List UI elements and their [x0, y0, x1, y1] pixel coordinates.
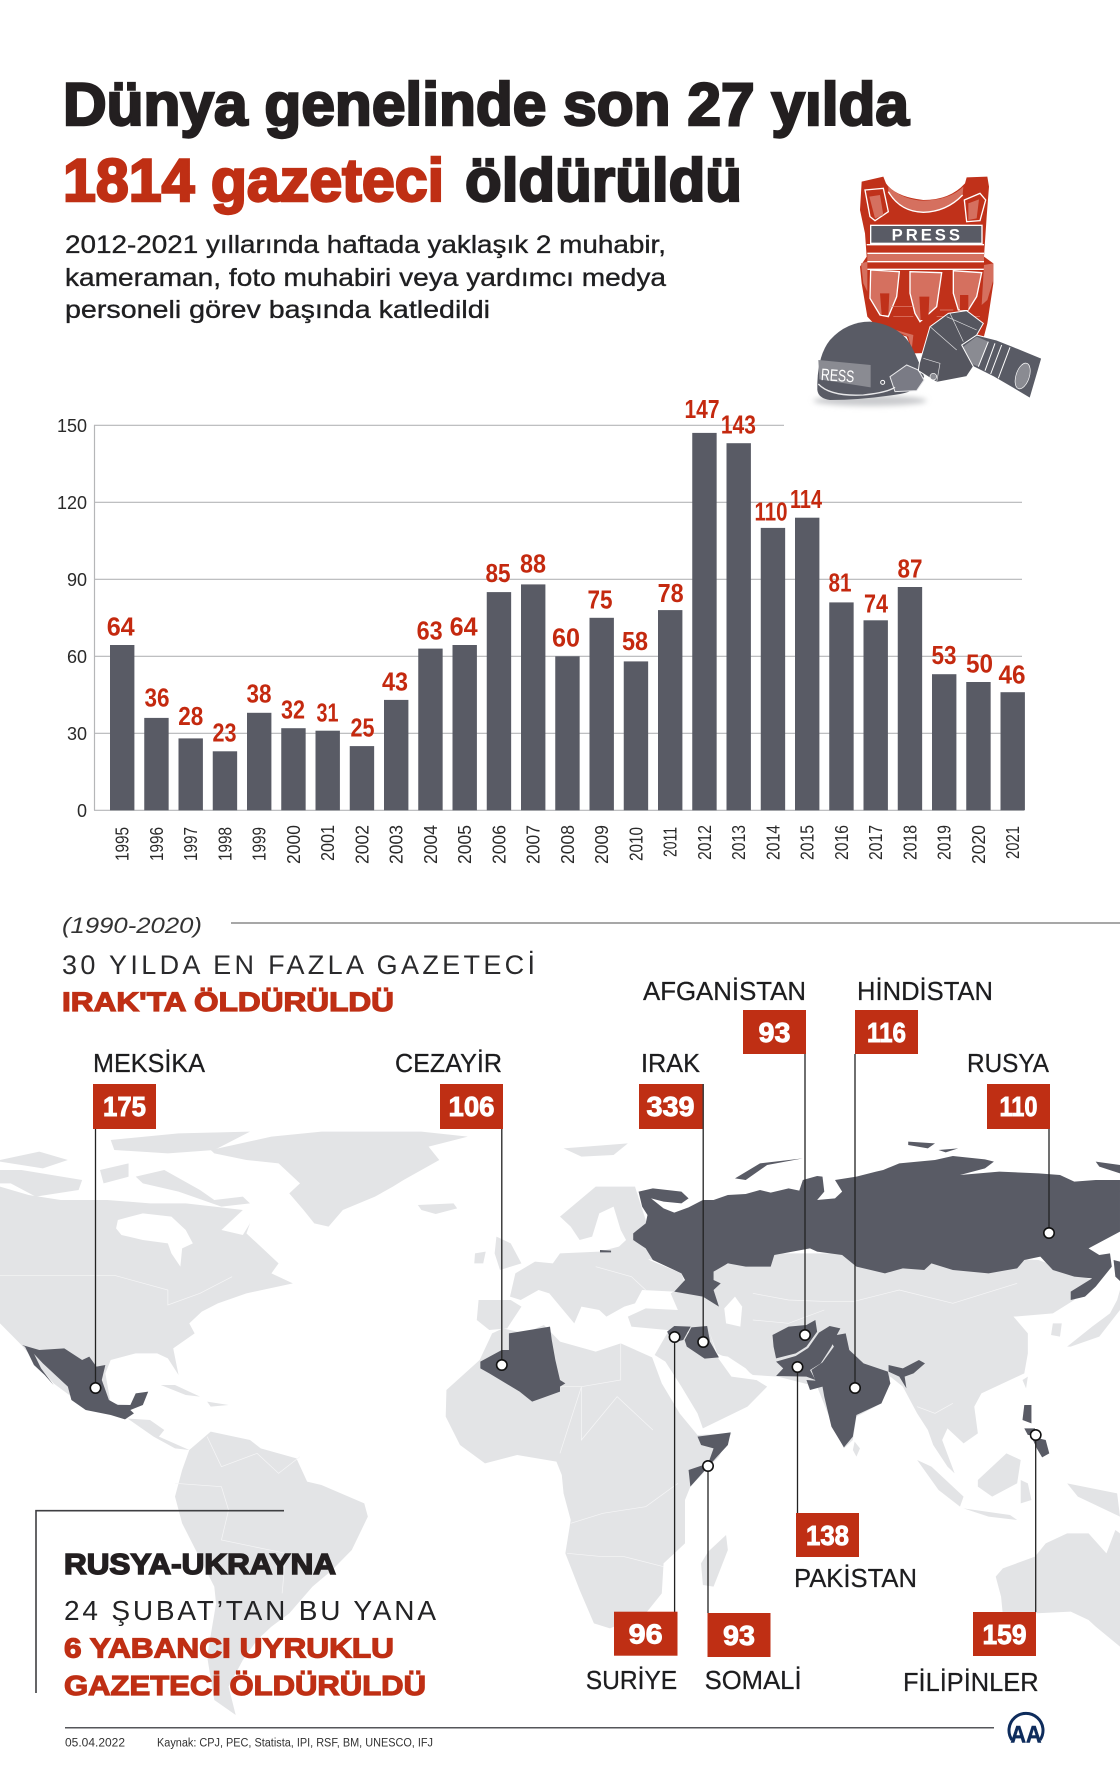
x axis years: 2012 — [695, 825, 715, 860]
bar value labels: 38 — [246, 679, 272, 709]
bar value labels: 25 — [350, 713, 374, 743]
callout: Rusya 110: RUSYA — [967, 1048, 1050, 1078]
world map — [0, 1132, 1120, 1715]
callout: Irak 339: 339 — [646, 1091, 694, 1122]
bar value labels: 78 — [658, 578, 684, 608]
vest — [860, 177, 993, 353]
bar value labels: 75 — [588, 585, 612, 615]
x axis years: 2005 — [455, 825, 475, 864]
bar value labels: 147 — [684, 394, 720, 424]
callout: Afganistan 93: AFGANİSTAN — [643, 976, 806, 1006]
x axis years: 2016 — [832, 825, 852, 860]
icon: press vest, helmet and camera — [813, 177, 1042, 406]
helmet: RESS — [820, 365, 855, 386]
bar value labels: 32 — [281, 694, 305, 724]
bar value labels: 60 — [552, 623, 580, 653]
y axis labels: 90 — [67, 570, 87, 590]
x axis years: 2000 — [284, 825, 304, 864]
callout: Cezayir 106: 106 — [448, 1091, 494, 1122]
callout: Meksika 175: 175 — [103, 1091, 146, 1122]
grid and axis — [94, 425, 1024, 810]
y axis labels — [57, 416, 87, 821]
x axis years: 2010 — [626, 827, 646, 861]
panel: Russia-Ukraine note: 6 YABANCI UYRUKLU — [64, 1633, 394, 1664]
x axis years: 2006 — [490, 825, 510, 864]
x axis years: 1999 — [250, 827, 270, 861]
subtitle text: 2012-2021 yıllarında haftada yaklaşık 2 muhabir, — [65, 231, 666, 259]
Pakistan — [776, 1326, 840, 1380]
footer: date and source: Kaynak: CPJ, PEC, Statista, IPI, RSF, BM, UNESCO, IFJ — [157, 1738, 433, 1750]
x axis years: 1996 — [147, 827, 167, 861]
callout: Irak 339 — [639, 1048, 708, 1347]
x axis years: 2019 — [935, 825, 955, 860]
callout: Rusya 110: 110 — [1000, 1091, 1038, 1122]
section heading: 30 years: (1990-2020) — [62, 913, 202, 938]
y axis labels: 150 — [57, 416, 87, 436]
bar value labels: 28 — [178, 701, 203, 731]
bar value labels — [107, 394, 1025, 748]
bar value labels: 43 — [382, 667, 408, 697]
callout: Suriye 96: SURİYE — [586, 1665, 677, 1695]
camera — [918, 311, 1042, 398]
x axis years: 2001 — [318, 825, 338, 861]
x axis years: 2009 — [592, 825, 612, 864]
helmet — [817, 322, 924, 400]
Iraq — [685, 1326, 719, 1359]
bar value labels: 31 — [316, 698, 338, 728]
callout: Hindistan 116: 116 — [867, 1017, 906, 1048]
bar value labels: 64 — [450, 612, 478, 642]
Somalia — [689, 1432, 731, 1487]
y axis labels: 120 — [57, 493, 87, 513]
bar value labels: 46 — [998, 659, 1026, 689]
Afghanistan — [772, 1320, 817, 1358]
x axis years: 1997 — [181, 827, 201, 861]
bar chart: journalists killed per year — [57, 394, 1026, 864]
callout: Pakistan 138: PAKİSTAN — [794, 1563, 917, 1593]
bar value labels: 64 — [107, 612, 135, 642]
title: 1814 gazeteci — [63, 147, 444, 214]
bars — [110, 433, 1025, 810]
bar value labels: 81 — [828, 567, 852, 597]
x axis years: 2018 — [900, 825, 920, 860]
bar value labels: 63 — [417, 615, 443, 645]
subtitle text — [65, 231, 666, 324]
x axis years: 1995 — [113, 827, 133, 861]
x axis years — [113, 825, 1023, 864]
callout: Filipinler 159 — [903, 1430, 1041, 1697]
light land: western hemisphere — [0, 1132, 468, 1715]
callout: Meksika 175: MEKSİKA — [93, 1048, 206, 1078]
bar value labels: 23 — [212, 718, 236, 748]
Philippines — [1022, 1405, 1031, 1423]
section heading: 30 years: IRAK'TA ÖLDÜRÜLDÜ — [62, 987, 394, 1017]
x axis years: 2003 — [387, 825, 407, 864]
section heading: 30 years: 30 YILDA EN FAZLA GAZETECİ — [62, 949, 535, 980]
bar value labels: 36 — [144, 683, 170, 713]
x axis years: 2015 — [798, 825, 818, 860]
light land: eastern hemisphere — [446, 1143, 1120, 1647]
x axis years: 2011 — [661, 827, 681, 857]
title: öldürüldü — [465, 147, 742, 214]
subtitle text: kameraman, foto muhabiri veya yardımcı medya — [65, 264, 666, 292]
callout: Afganistan 93: 93 — [758, 1017, 790, 1048]
x axis years: 2007 — [524, 825, 544, 864]
highlighted countries: Mexico and Algeria — [22, 1327, 560, 1419]
title: Dünya genelinde son 27 yılda — [63, 71, 910, 138]
bar value labels: 110 — [754, 497, 788, 527]
callout: Pakistan 138: 138 — [806, 1520, 849, 1551]
panel: Russia-Ukraine note — [36, 1511, 436, 1701]
icon: AA logo — [1009, 1713, 1043, 1749]
subtitle text: personeli görev başında katledildi — [65, 296, 490, 324]
vest: PRESS — [892, 225, 960, 244]
India — [806, 1333, 890, 1447]
bar value labels: 88 — [520, 549, 546, 579]
footer: date and source — [65, 1728, 994, 1750]
y axis labels: 0 — [77, 801, 87, 821]
callout: Somali 93: SOMALİ — [705, 1665, 802, 1695]
callout: Cezayir 106: CEZAYİR — [395, 1048, 502, 1078]
callout: Somali 93: 93 — [723, 1620, 755, 1651]
callout: Suriye 96 — [586, 1332, 680, 1695]
x axis years: 2020 — [969, 825, 989, 864]
callout: Irak 339: IRAK — [641, 1048, 701, 1078]
callout: Hindistan 116: HİNDİSTAN — [857, 976, 993, 1006]
bar value labels: 143 — [721, 409, 756, 439]
callout: Afganistan 93 — [643, 976, 810, 1340]
bar value labels: 58 — [622, 626, 648, 656]
bar value labels: 74 — [864, 589, 888, 619]
bar value labels: 85 — [486, 558, 510, 588]
callout: Pakistan 138 — [792, 1362, 917, 1593]
panel: Russia-Ukraine note: 24 ŞUBAT’TAN BU YANA — [64, 1595, 436, 1626]
highlighted countries: Russia, Syria, Iraq, Afghanistan, Pakistan, India, Somalia, Philippines — [560, 1142, 1120, 1487]
icon: AA logo: AA — [1010, 1722, 1042, 1749]
callout: Suriye 96: 96 — [629, 1618, 663, 1650]
x axis years: 1998 — [216, 827, 236, 861]
x axis years: 2008 — [558, 825, 578, 864]
x axis years: 2014 — [764, 825, 784, 860]
panel: Russia-Ukraine note: GAZETECİ ÖLDÜRÜLDÜ — [64, 1670, 426, 1701]
callout: Somali 93 — [703, 1461, 802, 1695]
x axis years: 2004 — [421, 825, 441, 864]
Syria — [667, 1326, 691, 1343]
section heading: 30 years — [62, 913, 1120, 1017]
callout: Filipinler 159: FİLİPİNLER — [903, 1667, 1039, 1697]
x axis years: 2021 — [1003, 826, 1023, 859]
panel: Russia-Ukraine note: RUSYA-UKRAYNA — [64, 1549, 336, 1581]
bar value labels: 50 — [966, 649, 993, 679]
callout: Rusya 110 — [967, 1048, 1054, 1238]
callout: Hindistan 116 — [850, 976, 993, 1393]
callout: Meksika 175 — [90, 1048, 206, 1393]
callout: Filipinler 159: 159 — [982, 1619, 1026, 1650]
x axis years: 2002 — [352, 825, 372, 864]
x axis years: 2017 — [866, 825, 886, 860]
bar value labels: 114 — [790, 484, 822, 514]
x axis years: 2013 — [729, 825, 749, 860]
callout: Cezayir 106 — [395, 1048, 507, 1370]
y axis labels: 60 — [67, 647, 87, 667]
Russia — [633, 1156, 1120, 1307]
bar value labels: 53 — [932, 640, 956, 670]
bar value labels: 87 — [898, 553, 922, 583]
footer: date and source: 05.04.2022 — [65, 1738, 125, 1750]
title — [63, 71, 910, 214]
y axis labels: 30 — [67, 724, 87, 744]
